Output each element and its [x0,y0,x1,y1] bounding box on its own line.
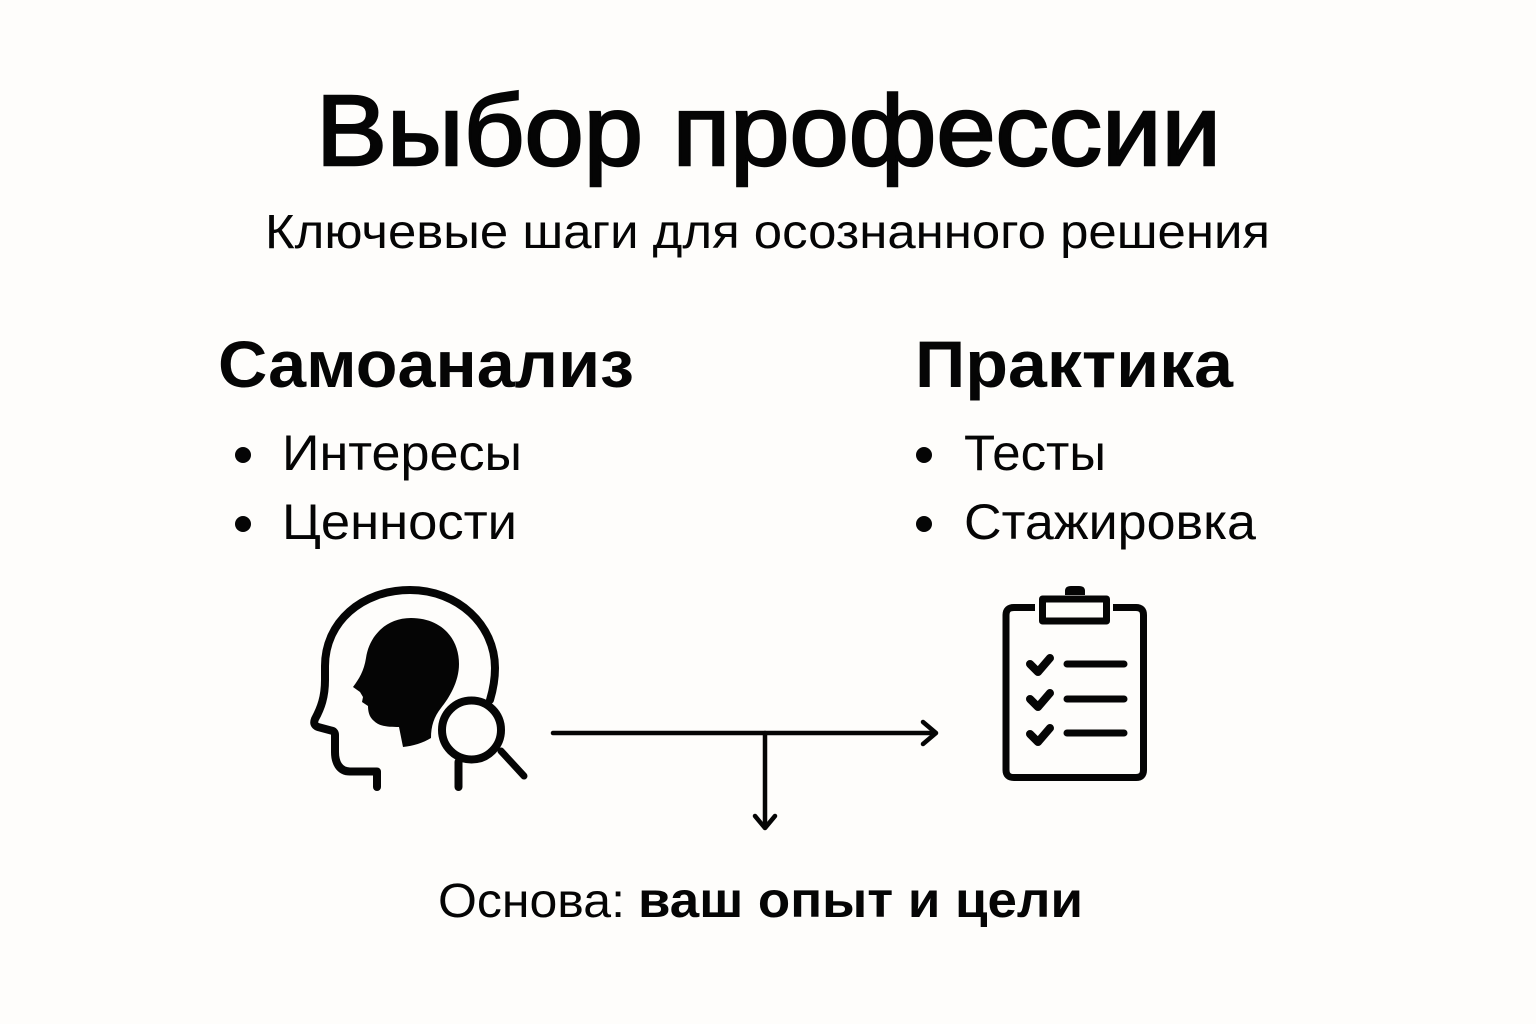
title: Выбор профессии [316,75,1221,187]
panel: self-analysis [218,327,634,550]
footer statement: ваш опыт и цели [638,872,1083,928]
list item: internship: Стажировка [964,494,1256,550]
icon: head with magnifying glass [314,590,524,787]
heading: self-analysis: Самоанализ [218,327,634,401]
panel: practice [915,327,1256,550]
footer statement: Основа: [438,875,625,928]
arrow: self-analysis to practice [553,722,936,744]
heading: practice: Практика [915,327,1234,401]
list item: values: Ценности [282,494,517,550]
footer statement [438,872,1083,928]
subtitle: Ключевые шаги для осознанного решения [265,206,1270,259]
icon: clipboard checklist [1006,586,1144,778]
list item: interests: Интересы [282,425,522,481]
arrow: down to foundation [755,733,775,828]
list item: tests: Тесты [964,425,1106,481]
